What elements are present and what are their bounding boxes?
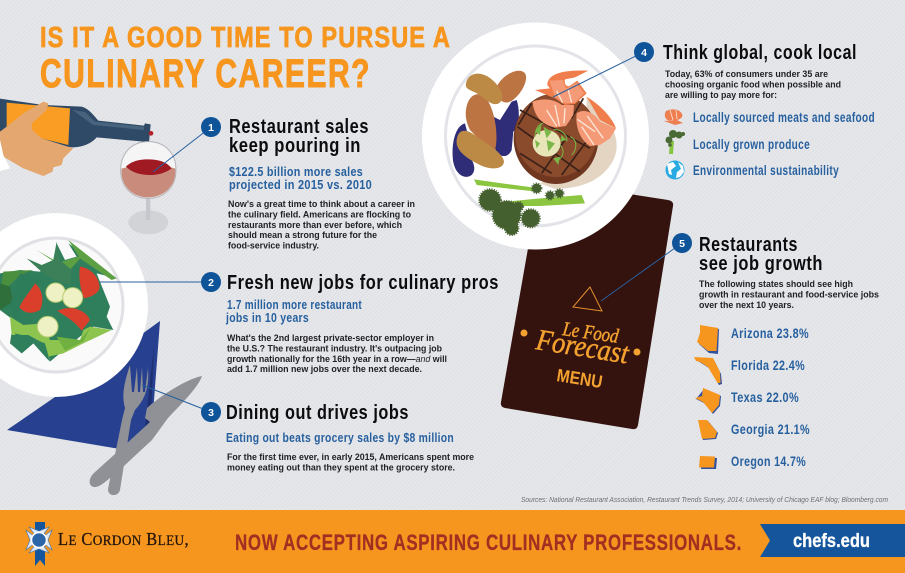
shrimp xyxy=(533,70,616,146)
heading 1 xyxy=(229,115,369,157)
body text 3: money eating out than they spent at the grocery store. xyxy=(227,462,455,472)
item: sustainability: Environmental sustainability xyxy=(693,163,839,178)
number badge 4: 4 xyxy=(641,47,647,59)
icon: broccoli xyxy=(666,130,685,154)
item: produce: Locally grown produce xyxy=(693,137,810,152)
url ribbon xyxy=(760,524,905,557)
number badge 3: 3 xyxy=(208,407,214,419)
menu title: Forecast xyxy=(533,323,631,371)
footer banner xyxy=(0,510,905,573)
state: Florida xyxy=(694,357,805,385)
potatoes xyxy=(453,71,526,177)
section 5: job growth xyxy=(601,233,879,469)
body text 1: the culinary field. Americans are flocking to xyxy=(228,208,411,220)
number badge 1 xyxy=(201,117,221,137)
number badge 5: 5 xyxy=(679,238,685,250)
body text 1: Now's a great time to think about a career in xyxy=(228,198,415,209)
callout line 4 xyxy=(553,52,644,97)
subhead 1 xyxy=(229,164,372,192)
body text 4: are willing to pay more for: xyxy=(665,89,777,100)
body text 2: What's the 2nd largest private-sector employer in xyxy=(227,332,434,343)
heading 3: Dining out drives jobs xyxy=(226,401,409,424)
body text 2: growth nationally for the 16th year in a row—and will xyxy=(227,353,447,364)
illustration: steak plate xyxy=(422,22,649,250)
icon: shrimp xyxy=(664,109,683,125)
illustration: wine glass xyxy=(121,142,176,234)
body text 3: For the first time ever, in early 2015, Americans spent more xyxy=(227,451,474,462)
subhead 3: Eating out beats grocery sales by $8 million xyxy=(226,430,454,445)
menu title: MENU xyxy=(555,365,604,392)
steak xyxy=(514,93,598,184)
section 4: think global xyxy=(553,41,875,180)
number badge 2 xyxy=(201,272,221,292)
heading 5: see job growth xyxy=(699,252,823,275)
callout line 1 xyxy=(153,127,211,172)
menu title: Le Food xyxy=(560,318,621,348)
section 3: dining out xyxy=(142,385,474,472)
illustration: wine bottle and hand xyxy=(0,99,153,176)
body text 1: restaurants more than ever before, which xyxy=(228,219,402,230)
illustration: fork and knife xyxy=(90,365,202,495)
state: Texas xyxy=(695,388,799,414)
herb butter xyxy=(533,123,576,165)
illustration: napkin xyxy=(7,321,160,452)
number badge 5 xyxy=(672,233,692,253)
green beans xyxy=(474,179,585,206)
number badge 3 xyxy=(201,402,221,422)
body text 4: Today, 63% of consumers under 35 are xyxy=(665,68,828,79)
callout line 3 xyxy=(142,385,211,412)
sources: Sources: National Restaurant Association, Restaurant Trends Survey, 2014; University of Chicago EAF blog; Bloomberg.com xyxy=(521,497,888,504)
state: Oregon xyxy=(699,454,806,469)
sauce xyxy=(540,97,617,188)
logo: Le Cordon Bleu: LE CORDON BLEU, xyxy=(58,529,189,549)
body text 5 xyxy=(699,278,879,310)
state: Texas: Texas 22.0% xyxy=(731,390,799,405)
subhead 2 xyxy=(225,297,362,325)
title: CULINARY CAREER? xyxy=(40,52,371,96)
state: Georgia: Georgia 21.1% xyxy=(731,422,810,437)
subhead 2: jobs in 10 years xyxy=(225,310,309,325)
parsley xyxy=(479,184,563,235)
body text 4 xyxy=(665,68,841,100)
subhead 1: $122.5 billion more sales xyxy=(229,164,363,179)
logo: Le Cordon Bleu xyxy=(26,522,189,566)
subhead 2: 1.7 million more restaurant xyxy=(227,297,362,312)
body text 1: should mean a strong future for the xyxy=(228,229,377,240)
section 2: fresh new jobs xyxy=(100,271,499,374)
body text 2: the U.S.? The restaurant industry. It's outpacing job xyxy=(227,342,442,354)
number badge 1: 1 xyxy=(208,122,214,134)
body text 3 xyxy=(227,451,474,472)
slogan: NOW ACCEPTING ASPIRING CULINARY PROFESSIONALS. xyxy=(235,530,742,555)
illustration: salad plate xyxy=(0,213,148,397)
section 1: restaurant sales xyxy=(153,115,415,250)
heading 1: Restaurant sales xyxy=(229,115,369,138)
callout line 5 xyxy=(601,243,682,301)
icon: globe xyxy=(666,160,684,180)
state: Florida: Florida 22.4% xyxy=(731,358,805,373)
illustration: menu xyxy=(501,180,673,429)
body text 2: add 1.7 million new jobs over the next decade. xyxy=(227,363,422,374)
state: Georgia xyxy=(698,420,810,440)
heading 2: Fresh new jobs for culinary pros xyxy=(227,271,499,294)
number badge 4 xyxy=(634,42,654,62)
body text 5: The following states should see high xyxy=(699,278,853,289)
body text 2 xyxy=(227,332,447,374)
body text 4: choosing organic food when possible and xyxy=(665,78,841,90)
heading 5 xyxy=(699,233,823,275)
subhead 1: projected in 2015 vs. 2010 xyxy=(229,177,372,192)
url ribbon: chefs.edu xyxy=(793,530,870,552)
menu triangle xyxy=(573,287,602,311)
heading 4: Think global, cook local xyxy=(663,41,857,64)
callout line 2 xyxy=(100,281,211,283)
body text 5: growth in restaurant and food-service jobs xyxy=(699,288,879,300)
body text 1 xyxy=(228,198,415,250)
menu title xyxy=(533,318,631,392)
state: Oregon: Oregon 14.7% xyxy=(731,454,806,469)
state: Arizona xyxy=(697,325,809,354)
body text 5: over the next 10 years. xyxy=(699,299,794,310)
title xyxy=(40,22,451,96)
menu dots xyxy=(520,330,640,356)
body text 1: food-service industry. xyxy=(228,240,319,250)
title: IS IT A GOOD TIME TO PURSUE A xyxy=(40,22,451,54)
heading 5: Restaurants xyxy=(699,233,798,256)
number badge 2: 2 xyxy=(208,277,214,289)
state: Arizona: Arizona 23.8% xyxy=(731,326,809,341)
heading 1: keep pouring in xyxy=(229,134,361,157)
